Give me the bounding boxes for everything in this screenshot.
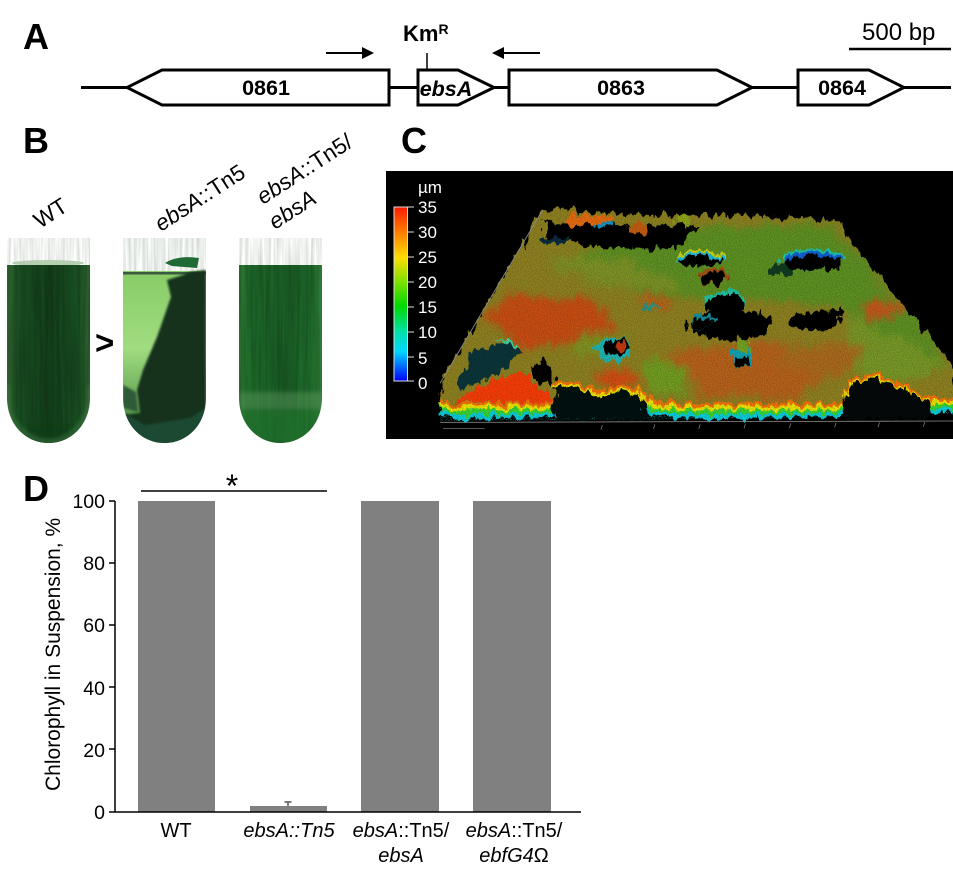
axis lines <box>440 210 953 422</box>
y tick labels: 0 <box>94 802 105 824</box>
significance line and star: * <box>226 468 238 504</box>
symbol: greater than: > <box>95 324 114 361</box>
KmR insertion label <box>403 21 449 70</box>
tube: WT <box>7 238 90 459</box>
baseline <box>81 86 951 89</box>
category labels: WT <box>160 820 192 842</box>
category labels <box>160 820 563 867</box>
y tick labels: 20 <box>83 740 105 762</box>
gene 0864: 0864 <box>818 76 866 100</box>
gene 0861 <box>127 70 389 105</box>
gene ebsA <box>418 70 494 105</box>
category labels: ebfG4Ω <box>479 845 549 867</box>
y axis title: Chlorophyll in Suspension, % <box>42 518 65 791</box>
gene 0863: 0863 <box>597 76 645 100</box>
y tick labels: 100 <box>72 491 105 513</box>
gene 0864 <box>798 70 904 105</box>
scale ticks: 15 <box>418 298 437 317</box>
arrow: reverse primer <box>492 47 540 59</box>
label ebsA::Tn5/ebsA: ebsA::Tn5/ <box>252 129 358 209</box>
y tick labels: 80 <box>83 553 105 575</box>
y tick labels <box>72 491 105 824</box>
scale ticks: 0 <box>418 374 427 393</box>
gene 0863 <box>509 70 752 105</box>
panel: bar chart <box>42 468 581 867</box>
tube: ebsA::Tn5/ebsA <box>239 238 322 443</box>
bright red patch <box>456 372 555 402</box>
top edge debris <box>541 222 700 249</box>
panel label A: A <box>23 16 49 57</box>
label WT: WT <box>29 193 72 233</box>
category labels: ebsA <box>378 845 424 867</box>
colour scale <box>394 178 442 393</box>
scale ticks: 35 <box>418 198 437 217</box>
category labels: ebsA::Tn5 <box>243 820 335 842</box>
unit label: µm <box>418 178 442 197</box>
scale ticks: 25 <box>418 248 437 267</box>
category labels: ebsA::Tn5/ <box>353 820 450 842</box>
y tick labels: 60 <box>83 615 105 637</box>
tube: ebsA::Tn5 <box>123 238 206 443</box>
scale ticks: 20 <box>418 273 437 292</box>
panel label D: D <box>23 468 49 509</box>
panel: biofilm 3D image <box>386 171 953 439</box>
label ebsA::Tn5/ebsA: ebsA <box>264 185 321 234</box>
panel label C: C <box>401 120 427 161</box>
error bar <box>284 802 292 806</box>
scale ticks: 30 <box>418 223 437 242</box>
axes <box>109 501 581 812</box>
panel label B: B <box>23 120 49 161</box>
gene ebsA: ebsA <box>420 77 472 101</box>
bars <box>138 501 551 812</box>
tube labels <box>29 129 358 236</box>
gene 0861: 0861 <box>242 76 290 100</box>
scale ticks: 5 <box>418 349 427 368</box>
category labels: ebsA::Tn5/ <box>466 820 563 842</box>
biofilm surface <box>436 205 953 430</box>
KmR insertion label: Km <box>403 21 438 46</box>
scale ticks: 10 <box>418 323 437 342</box>
gene map <box>81 70 951 105</box>
scale ticks <box>418 198 437 393</box>
KmR insertion label: R <box>438 21 449 37</box>
label ebsA::Tn5: ebsA::Tn5 <box>150 159 250 236</box>
scale bar 500 bp: 500 bp <box>862 19 935 46</box>
scale bar 500 bp <box>849 19 951 49</box>
left floor patch <box>456 342 523 392</box>
arrow: forward primer <box>326 47 374 59</box>
holes with coloured walls <box>593 249 845 367</box>
y tick labels: 40 <box>83 678 105 700</box>
